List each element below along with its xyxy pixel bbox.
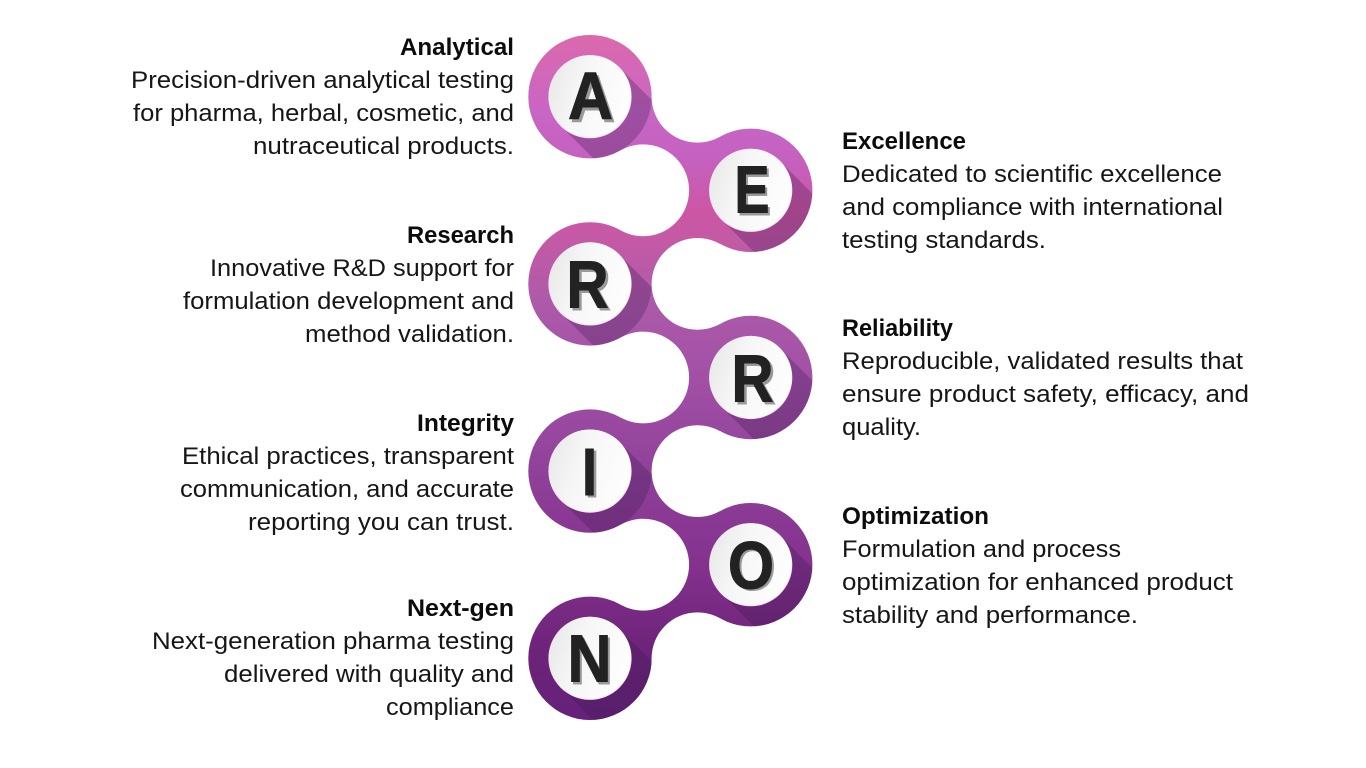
- text block: Optimization: Optimization: [842, 503, 989, 530]
- text block: Integrity: [180, 410, 515, 536]
- node: O: [709, 523, 812, 626]
- node: E: [709, 148, 812, 252]
- text block: Integrity: Ethical practices, transparent: [182, 443, 514, 470]
- text block: Reliability: quality.: [842, 414, 921, 441]
- text block: Excellence: Dedicated to scientific excellence: [842, 161, 1222, 188]
- node: E: E: [734, 152, 770, 228]
- node: I: [548, 430, 652, 533]
- node: E: E: [736, 155, 772, 230]
- node: N: [548, 616, 652, 720]
- text block: Analytical: nutraceutical products.: [253, 133, 514, 160]
- text block: Research: Research: [407, 222, 514, 249]
- text block: Optimization: Formulation and process: [842, 536, 1121, 563]
- text block: Next-gen: compliance: [386, 694, 514, 721]
- text block: Research: [183, 222, 514, 348]
- node: O: O: [730, 530, 776, 605]
- node: A: [548, 55, 652, 158]
- text block: Integrity: reporting you can trust.: [248, 509, 514, 536]
- node: O: O: [728, 528, 774, 604]
- text block: Reliability: [842, 315, 1249, 441]
- text block: Reliability: Reproducible, validated results that: [842, 348, 1243, 375]
- connected purple chain body: [528, 35, 812, 720]
- text block: Next-gen: [152, 595, 514, 721]
- text block: Excellence: [842, 128, 1223, 254]
- text block: Analytical: Precision-driven analytical testing: [131, 67, 514, 94]
- text block: Research: Innovative R&D support for: [210, 255, 514, 282]
- node: R: [548, 242, 652, 346]
- node: A: A: [568, 59, 613, 134]
- chain diagram: AERRION: [528, 35, 812, 720]
- node: N: N: [568, 622, 612, 696]
- text block: Research: method validation.: [305, 321, 514, 348]
- node: I: I: [584, 437, 600, 512]
- text block: Research: formulation development and: [183, 288, 514, 315]
- text block: Optimization: stability and performance.: [842, 602, 1138, 629]
- text block: Excellence: testing standards.: [842, 227, 1046, 254]
- text block: Integrity: Integrity: [417, 410, 515, 437]
- text block: Reliability: ensure product safety, efficacy, and: [842, 381, 1249, 408]
- node: R: R: [569, 250, 611, 325]
- text block: Integrity: communication, and accurate: [180, 476, 514, 503]
- text block: Next-gen: Next-generation pharma testing: [152, 628, 514, 655]
- text block: Analytical: for pharma, herbal, cosmetic, and: [133, 100, 514, 127]
- text block: Optimization: optimization for enhanced product: [842, 569, 1233, 596]
- text block: Analytical: [131, 34, 514, 160]
- node: A: A: [570, 62, 616, 137]
- text block: Analytical: Analytical: [400, 34, 514, 61]
- text block: Excellence: Excellence: [842, 128, 966, 155]
- text block: Excellence: and compliance with international: [842, 194, 1223, 221]
- text block: Reliability: Reliability: [842, 315, 954, 342]
- node: R second: R: [734, 344, 776, 419]
- node: R second: [709, 336, 812, 439]
- node: I: I: [582, 435, 597, 510]
- text block: Next-gen: Next-gen: [407, 595, 514, 622]
- node: R second: R: [732, 342, 774, 416]
- node: R: R: [566, 248, 608, 322]
- text block: Next-gen: delivered with quality and: [224, 661, 514, 688]
- text block: Optimization: [842, 503, 1233, 629]
- node: N: N: [570, 624, 614, 699]
